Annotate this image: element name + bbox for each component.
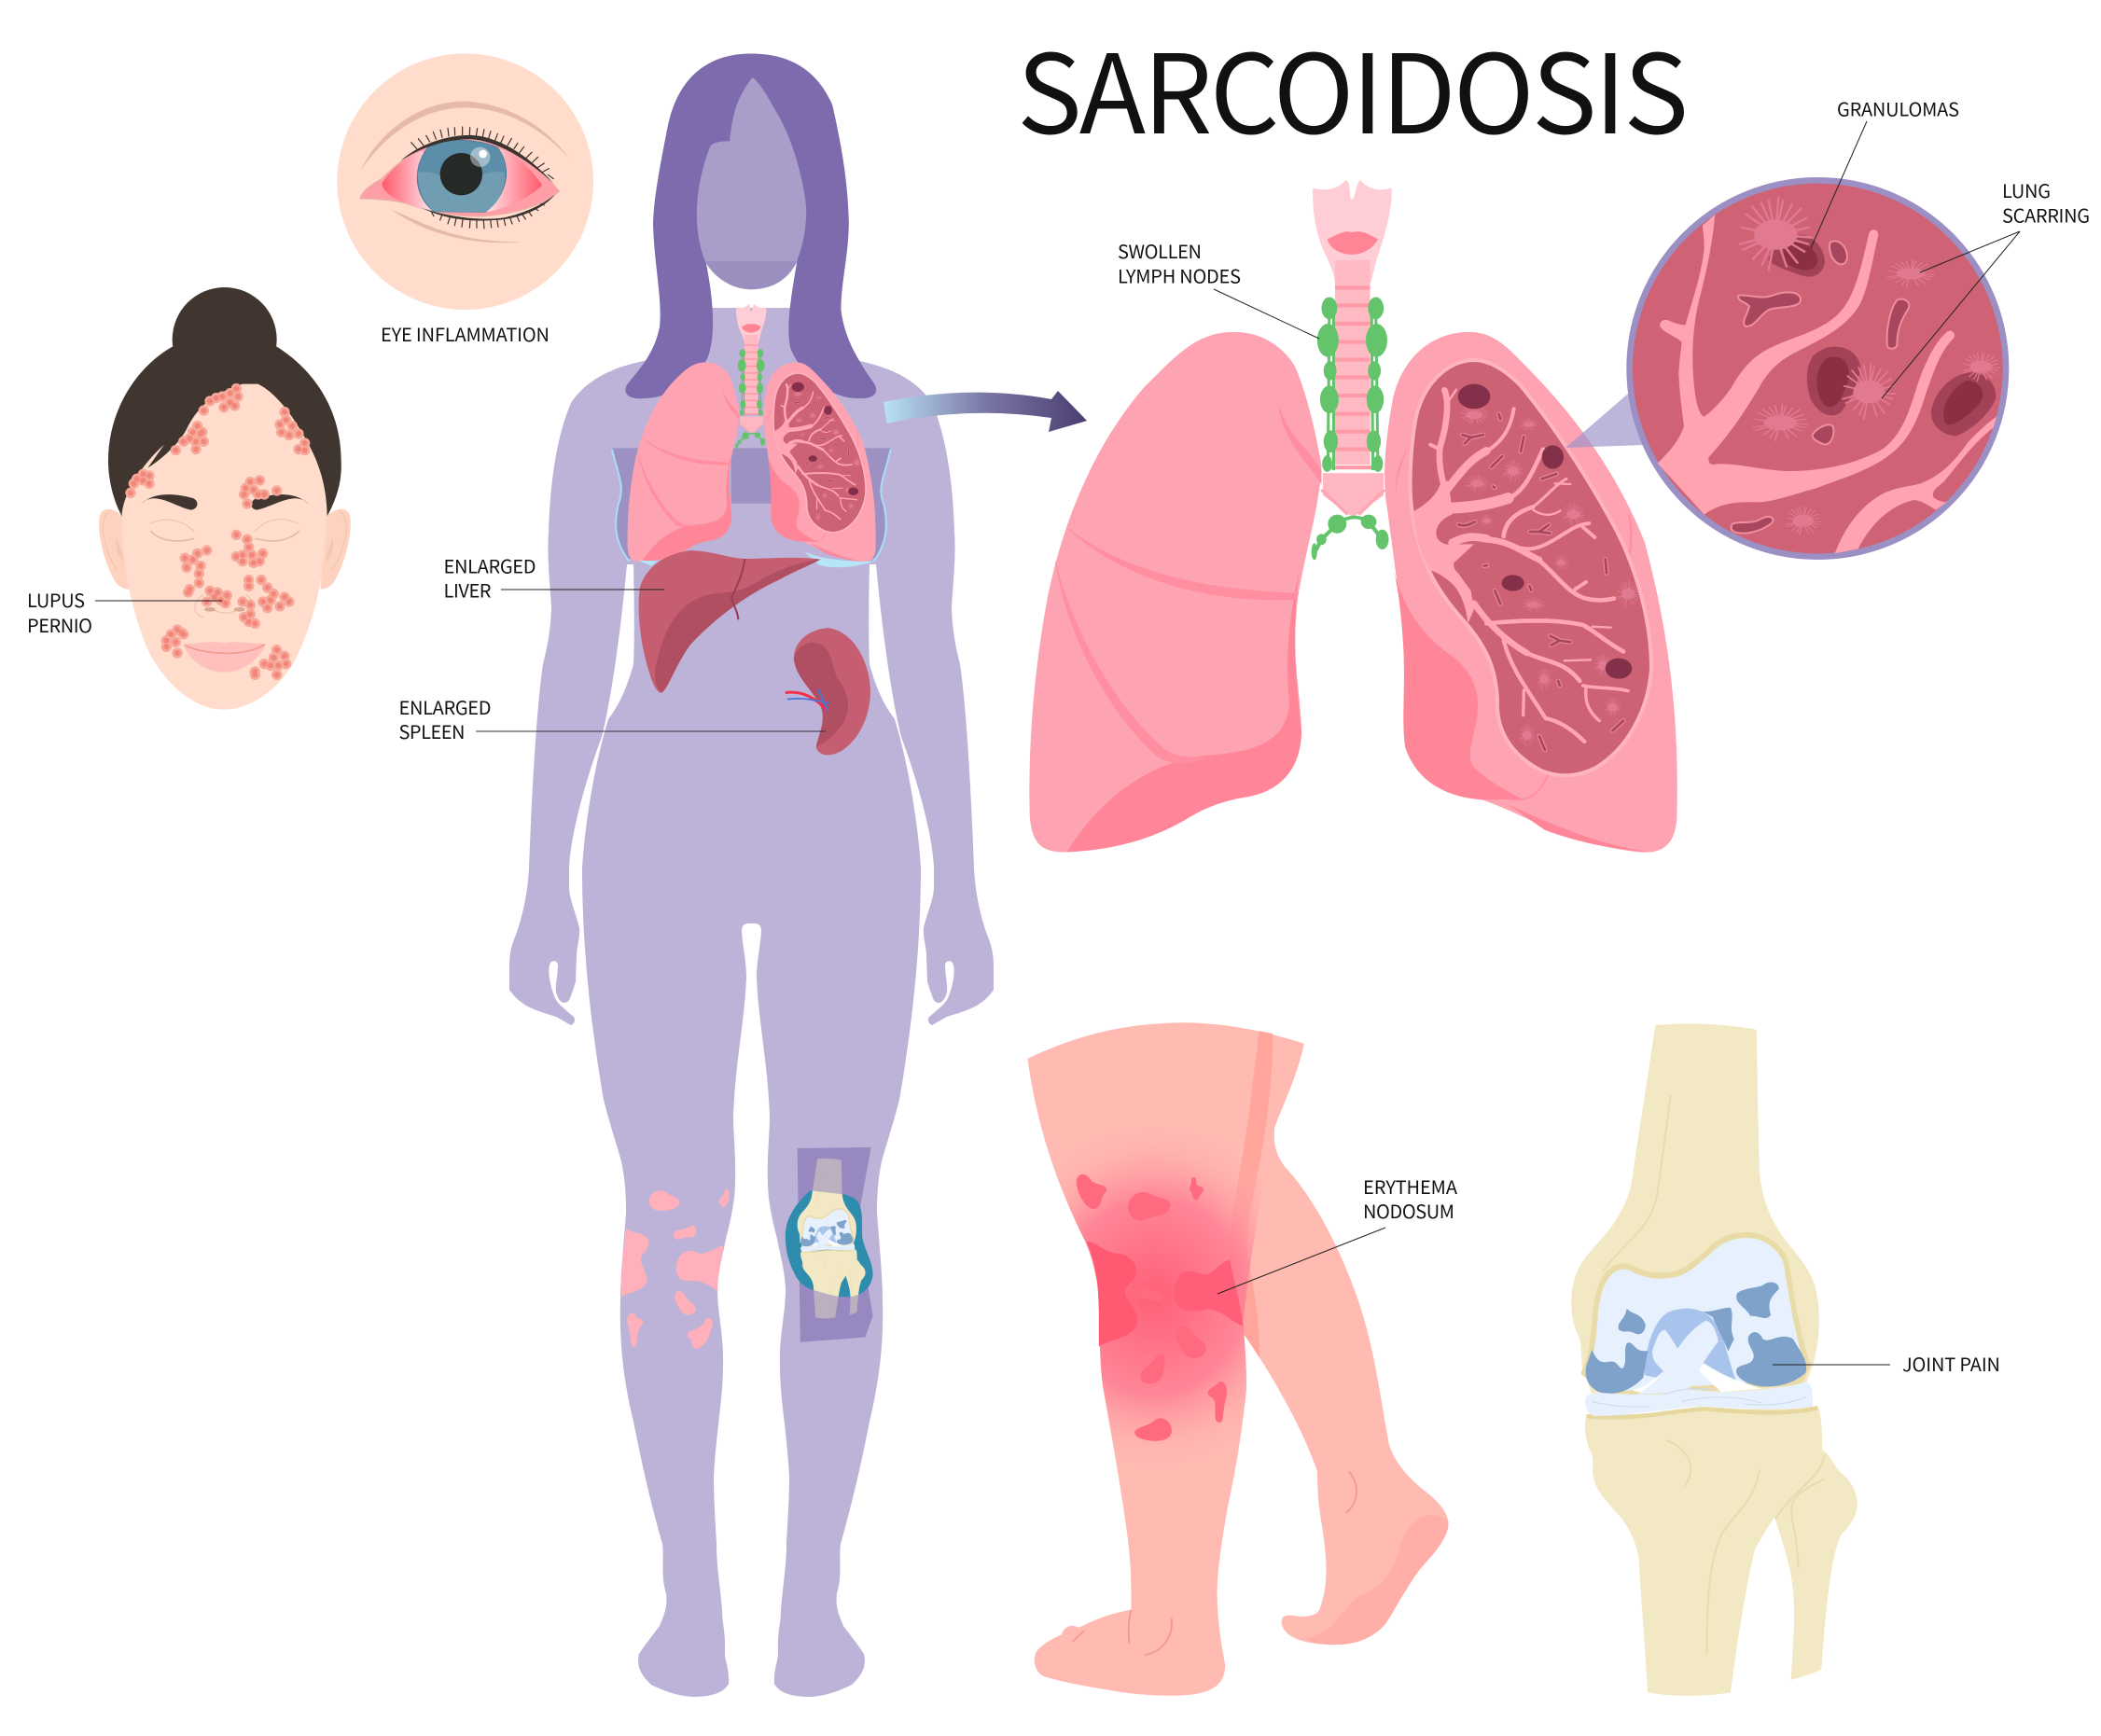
label: enlarged spleen [399,693,826,744]
arrow to lungs [884,391,1087,432]
right lung [1384,332,1677,853]
eyebrows [140,494,310,510]
hair [108,287,341,516]
small lungs in body [628,304,876,562]
granuloma right [1931,372,1996,436]
label: enlarged spleen: ENLARGED [399,693,491,720]
eyelid creases [361,102,569,243]
meniscus [1585,1382,1813,1416]
cartilage [1584,1235,1807,1395]
vessel cross sections [1458,414,1623,750]
cruciate dome [1645,1309,1736,1380]
granuloma top [1768,235,1825,277]
teal swelling [786,1190,873,1297]
redness [1061,1151,1259,1442]
eyelid line [400,135,555,221]
chest panel behind lungs [612,448,891,562]
title: SARCOIDOSIS [1017,7,1689,165]
ears [99,509,351,590]
label: enlarged liver: LIVER [444,576,492,603]
nodules [1077,1174,1243,1441]
sclera [360,139,559,216]
hair [625,54,876,398]
closed eyes [150,520,299,541]
enlarged spleen [786,628,870,755]
ankle and heel creases [1072,1471,1357,1655]
knee joint illustration [1571,1023,1858,1696]
label: enlarged liver: ENLARGED [444,552,536,578]
vessel cross-sections [1732,242,1909,534]
white gap [1632,1363,1761,1395]
faded bones [798,1159,866,1318]
femur [1571,1023,1819,1395]
label: lung scarring: LUNG [2002,176,2051,203]
label: lupus pernio: LUPUS [27,586,85,613]
label: enlarged liver [444,552,664,603]
inset circle [1630,180,2006,557]
label: enlarged spleen: SPLEEN [399,717,465,744]
label: lupus pernio [27,586,222,638]
inflamed vessels [382,147,542,212]
erythema nodosum legs [990,1022,1449,1696]
face with lupus pernio [99,287,351,710]
highlight [470,147,490,167]
back leg [1240,1128,1449,1645]
zoom beam [1565,388,1644,448]
granuloma centre [1807,347,1860,415]
large lungs illustration [1029,180,1677,853]
knee joint detail [797,1190,866,1297]
back foot sole [1305,1515,1448,1645]
label: lung scarring: SCARRING [2002,201,2090,228]
label: erythema nodosum: NODOSUM [1363,1197,1454,1224]
cut section of right lung [1396,360,1651,775]
head and hair of body figure [612,54,891,562]
purple knee panel [798,1147,873,1342]
diaphragm highlights [638,551,874,567]
swollen lymph nodes [1312,297,1388,560]
tibia [1585,1407,1822,1696]
label: granulomas: GRANULOMAS [1837,95,1959,121]
vessels [1658,215,1997,553]
face [697,77,806,289]
chin shadow [705,261,797,289]
label: erythema nodosum: ERYTHEMA [1363,1173,1458,1200]
enlarged liver [639,550,821,693]
label: joint pain: JOINT PAIN [1902,1350,2000,1377]
scar marks [1460,405,1639,746]
small knee in body [786,1147,873,1342]
lips [184,642,266,673]
label: lung scarring [1882,176,2090,398]
skin rash on left leg of body [621,1188,730,1349]
label: eye inflammation: EYE INFLAMMATION [381,320,550,347]
granulomas [1458,384,1632,679]
iris [417,140,507,212]
label: granulomas [1811,95,1959,248]
eyelashes [411,127,553,229]
rash clusters [131,389,305,674]
magnified lung tissue inset [1630,180,2006,557]
eye inflammation circle [337,53,593,310]
face skin [122,384,327,710]
label: lupus pernio: PERNIO [27,611,92,638]
left lung [1029,332,1321,852]
label: swollen lymph nodes: SWOLLEN [1118,237,1202,264]
nose [195,595,254,618]
fibula [1773,1450,1858,1680]
label: swollen lymph nodes [1118,237,1319,339]
trachea [1313,180,1392,518]
bronchial branches [1413,390,1628,742]
scar fibres [1740,198,1999,535]
front leg [1027,1022,1304,1696]
pupil [440,153,482,195]
nodule: large left [1087,1242,1137,1347]
inner thigh stripe [1228,1031,1273,1358]
label: erythema nodosum [1217,1173,1458,1294]
erosions [1586,1283,1806,1394]
label: swollen lymph nodes: LYMPH NODES [1118,262,1241,289]
ligaments [1636,1321,1718,1395]
body silhouette [509,308,994,1697]
